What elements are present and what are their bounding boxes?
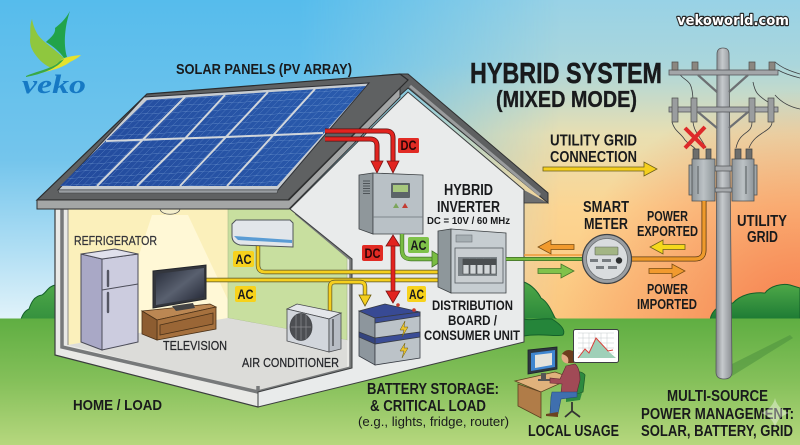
label: refrigerator: REFRIGERATOR xyxy=(74,233,157,248)
DC label top: DC xyxy=(400,137,416,153)
label: home load: HOME / LOAD xyxy=(73,397,162,414)
heading: solar panels: SOLAR PANELS (PV ARRAY) xyxy=(176,61,352,78)
television xyxy=(153,265,206,311)
label: hybrid inverter: HYBRID xyxy=(444,182,493,199)
roof xyxy=(37,74,548,209)
meter buttons xyxy=(590,259,617,269)
gable wall xyxy=(258,92,524,407)
watermark sparkle xyxy=(761,398,789,428)
label: power exported: POWER xyxy=(647,209,688,225)
arrow: export orange left xyxy=(538,240,574,254)
utility pole xyxy=(669,48,800,379)
subtitle: (MIXED MODE) xyxy=(496,86,637,112)
fan grille xyxy=(290,314,312,340)
label: power exported xyxy=(637,209,698,240)
label: air conditioner: AIR CONDITIONER xyxy=(242,355,339,370)
hybrid inverter xyxy=(359,173,423,234)
lower cross arm xyxy=(669,107,778,112)
upper cross arm xyxy=(669,70,778,75)
label: hybrid inverter: INVERTER xyxy=(437,199,500,216)
label: utility grid: UTILITY xyxy=(737,213,787,230)
breaker panel xyxy=(455,248,503,283)
cut wall edges xyxy=(62,209,351,392)
distribution board xyxy=(438,229,506,293)
wires from board to meter xyxy=(506,255,584,259)
label: power imported: IMPORTED xyxy=(637,297,697,313)
AC chip battery: AC xyxy=(409,286,424,302)
usage chart callout xyxy=(574,330,618,362)
main title: HYBRID SYSTEM xyxy=(470,58,662,90)
label: distribution board: DISTRIBUTION xyxy=(432,297,513,313)
photovoltaic cells xyxy=(60,86,366,186)
label: distribution board: CONSUMER UNIT xyxy=(424,327,520,343)
ceiling light cone xyxy=(112,215,228,338)
desk and computer xyxy=(515,347,585,418)
label: utility grid connection xyxy=(550,132,637,166)
ground xyxy=(0,318,800,445)
green interior wall xyxy=(228,209,347,340)
pole shadow xyxy=(732,335,793,376)
green AC wire inverter to board xyxy=(402,234,445,267)
panel separators xyxy=(97,89,323,186)
computer monitor xyxy=(528,347,557,374)
braces xyxy=(698,75,748,128)
arrow: import orange right xyxy=(649,264,685,278)
yellow AC wires xyxy=(206,246,442,312)
floor xyxy=(68,318,347,392)
TV cabinet xyxy=(142,304,216,340)
meter display xyxy=(595,247,618,255)
label: multi-source power management: MULTI-SOURCE xyxy=(667,388,768,405)
DC double arrow inverter to battery xyxy=(386,235,400,303)
label: battery storage: (e.g., lights, fridge, router) xyxy=(358,414,509,429)
insulators xyxy=(672,62,775,70)
label: battery storage xyxy=(358,381,509,429)
AC chip green: AC xyxy=(410,237,426,253)
bush in front of horizon xyxy=(524,319,564,336)
label: utility grid connection: UTILITY GRID xyxy=(550,132,637,150)
orange grid line to meter xyxy=(630,201,704,259)
label: battery storage: BATTERY STORAGE: xyxy=(367,381,499,398)
logo: veko bird xyxy=(22,11,86,99)
battery bolts xyxy=(400,321,408,358)
label: hybrid inverter xyxy=(427,182,510,227)
label chips xyxy=(233,237,429,302)
ceiling lamp xyxy=(160,209,180,214)
outdoor air conditioner xyxy=(287,304,341,352)
desk xyxy=(515,372,572,418)
label: distribution board: BOARD / xyxy=(448,312,497,328)
DC wiring from panels to inverter xyxy=(325,131,399,173)
transformer bushings xyxy=(693,149,752,159)
label: utility grid connection: CONNECTION xyxy=(550,149,637,166)
label: distribution board xyxy=(424,297,520,343)
flow arrows xyxy=(538,240,685,278)
right transformer xyxy=(732,159,757,201)
label: smart meter xyxy=(583,199,629,233)
wires xyxy=(672,62,800,150)
label: utility grid xyxy=(737,213,787,246)
arrow: export yellow left xyxy=(650,240,685,254)
AC chip television: AC xyxy=(238,286,254,302)
label: power imported: POWER xyxy=(647,282,688,298)
floor slab and left wall xyxy=(55,209,352,407)
panel frame xyxy=(58,83,369,190)
label: hybrid inverter: DC = 10V / 60 MHz xyxy=(427,215,510,227)
label: television: TELEVISION xyxy=(163,338,227,353)
label: utility grid: GRID xyxy=(747,229,778,246)
gable roof band xyxy=(398,74,548,203)
solar panels xyxy=(58,83,369,193)
inverter display xyxy=(391,183,410,198)
DC chip lower: DC xyxy=(364,245,380,261)
roof fascia xyxy=(37,88,400,209)
inverter status lights xyxy=(393,203,399,208)
label: local usage: LOCAL USAGE xyxy=(528,423,619,440)
house xyxy=(55,92,524,407)
refrigerator xyxy=(81,249,138,350)
AC chip wall unit: AC xyxy=(236,251,252,267)
roof slab xyxy=(37,74,408,200)
pole shaft xyxy=(716,48,732,379)
person xyxy=(550,364,580,393)
label: power imported xyxy=(637,282,697,313)
yellow interior wall xyxy=(68,209,228,345)
smart meter xyxy=(582,234,632,284)
website label: vekoworld.com xyxy=(677,13,789,29)
label: power exported: EXPORTED xyxy=(637,224,698,240)
slab corner xyxy=(257,392,259,407)
disconnect X mark xyxy=(685,127,705,148)
logo wordmark: veko xyxy=(22,70,86,99)
wall air conditioner unit xyxy=(232,220,293,247)
label: smart meter: METER xyxy=(584,216,628,233)
sky background xyxy=(0,0,800,320)
pole brackets xyxy=(715,166,732,192)
bushes xyxy=(4,282,800,353)
arrow: import green right xyxy=(538,264,574,278)
left transformer xyxy=(689,159,715,201)
utility arrow xyxy=(543,162,657,176)
label: multi-source power management xyxy=(641,388,794,440)
chair xyxy=(569,372,585,396)
label: smart meter: SMART xyxy=(583,199,629,216)
label: battery storage: & CRITICAL LOAD xyxy=(370,398,486,415)
battery storage xyxy=(359,303,420,365)
